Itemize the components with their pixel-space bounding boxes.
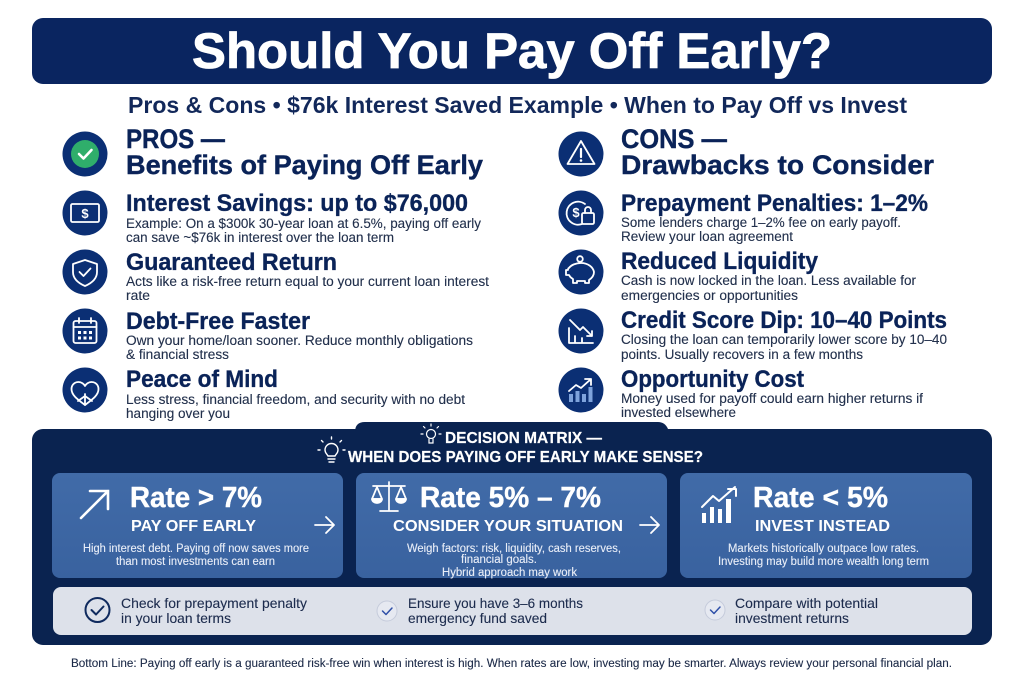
con: reduced liquidity: Cash is now locked in the loan. Less available for: [621, 273, 916, 288]
checklist bar: [53, 587, 972, 635]
card: rate 5 to 7%: [356, 473, 667, 579]
icon: scales: [372, 482, 406, 511]
icon: check 1: [86, 598, 110, 622]
matrix heading: [348, 430, 703, 466]
cons heading: Drawbacks to Consider: [621, 150, 935, 180]
card: rate below 5%: [680, 473, 972, 578]
pro: debt-free faster: & financial stress: [126, 347, 229, 362]
cons heading: [621, 124, 935, 180]
icon: large bulb: [318, 437, 345, 462]
icon: banknote: $: [81, 206, 89, 221]
con: prepayment penalties: Some lenders charge 1–2% fee on early payoff.: [621, 215, 901, 230]
card: rate above 7%: High interest debt. Paying off now saves more: [83, 543, 309, 555]
icon: piggy bank: [558, 250, 604, 294]
card: rate below 5%: Rate < 5%: [753, 482, 888, 514]
icon: warning triangle: [558, 132, 604, 176]
icon: falling chart: [558, 308, 604, 354]
panel: cons: [558, 124, 947, 420]
title banner: [32, 18, 992, 84]
arrow: [315, 517, 334, 533]
con: opportunity cost: Opportunity Cost: [621, 366, 804, 393]
checklist bar: in your loan terms: [121, 610, 231, 626]
checklist bar: Ensure you have 3–6 months: [408, 595, 583, 611]
icon: check 3: [705, 600, 725, 620]
pro: debt-free faster: Own your home/loan sooner. Reduce monthly obligations: [126, 333, 473, 348]
pro: guaranteed return: rate: [126, 288, 150, 303]
con: opportunity cost: Money used for payoff could earn higher returns if: [621, 391, 923, 406]
icon: banknote: [62, 190, 108, 236]
panel: decision matrix: [32, 422, 992, 645]
con: reduced liquidity: [621, 248, 916, 303]
card: rate 5 to 7%: CONSIDER YOUR SITUATION: [393, 518, 623, 535]
pro: debt-free faster: Debt-Free Faster: [126, 308, 310, 335]
pro: guaranteed return: [126, 249, 489, 303]
card: rate above 7%: than most investments can earn: [116, 556, 275, 568]
matrix heading: WHEN DOES PAYING OFF EARLY MAKE SENSE?: [348, 449, 703, 466]
card: rate 5 to 7%: Rate 5% – 7%: [420, 482, 601, 514]
con: prepayment penalties: Review your loan agreement: [621, 229, 793, 244]
bottom line: Bottom Line: Paying off early is a guaranteed risk-free win when interest is high. When rates are low, investing may be smarter. Always review your personal financial plan.: [71, 658, 952, 670]
con: credit score dip: Closing the loan can temporarily lower score by 10–40: [621, 332, 947, 347]
card: rate below 5%: Investing may build more wealth long term: [718, 556, 929, 568]
card: rate 5 to 7%: financial goals.: [461, 554, 537, 566]
pro: peace of mind: [126, 366, 465, 421]
icon: rising bar chart: [558, 368, 604, 412]
checklist bar: Check for prepayment penalty: [121, 595, 307, 611]
card: rate above 7%: Rate > 7%: [130, 482, 262, 514]
pro: peace of mind: Peace of Mind: [126, 366, 278, 393]
card: rate below 5%: INVEST INSTEAD: [755, 518, 890, 535]
checklist bar: investment returns: [735, 610, 849, 626]
pros heading: Benefits of Paying Off Early: [126, 150, 483, 180]
card: rate above 7%: [52, 473, 343, 578]
con: credit score dip: points. Usually recovers in a few months: [621, 347, 863, 362]
icon: check 2: [377, 601, 397, 621]
con: reduced liquidity: emergencies or opportunities: [621, 288, 798, 303]
pro: guaranteed return: Guaranteed Return: [126, 249, 337, 276]
title banner: Should You Pay Off Early?: [192, 23, 832, 79]
con: opportunity cost: invested elsewhere: [621, 405, 736, 420]
checklist bar: Compare with potential: [735, 595, 878, 611]
icon: shield: [62, 250, 108, 294]
con: reduced liquidity: Reduced Liquidity: [621, 248, 819, 275]
subtitle: Pros & Cons • $76k Interest Saved Example • When to Pay Off vs Invest: [128, 92, 907, 118]
con: opportunity cost: [621, 366, 923, 420]
pro: peace of mind: Less stress, financial freedom, and security with no debt: [126, 392, 465, 407]
con: prepayment penalties: [621, 190, 928, 244]
card: rate 5 to 7%: Hybrid approach may work: [442, 567, 577, 579]
icon: growth chart: [702, 487, 736, 523]
con: credit score dip: [621, 307, 947, 362]
pros heading: PROS —: [126, 124, 225, 154]
con: credit score dip: Credit Score Dip: 10–40 Points: [621, 307, 947, 334]
icon: coin and lock: $: [572, 205, 580, 220]
pros heading: [126, 124, 483, 180]
matrix heading: DECISION MATRIX —: [445, 430, 602, 447]
con: prepayment penalties: Prepayment Penalties: 1–2%: [621, 190, 928, 217]
icon: calendar: [62, 308, 108, 354]
icon: small bulb: [421, 424, 441, 443]
icon: green check: [62, 132, 108, 176]
cons heading: CONS —: [621, 124, 727, 154]
card: rate above 7%: PAY OFF EARLY: [131, 518, 256, 535]
pro: peace of mind: hanging over you: [126, 406, 230, 421]
pro: guaranteed return: Acts like a risk-free return equal to your current loan interest: [126, 274, 489, 289]
card: rate below 5%: Markets historically outpace low rates.: [728, 543, 919, 555]
icon: coin and lock: [558, 190, 604, 236]
pro: interest savings: can save ~$76k in interest over the loan term: [126, 230, 394, 245]
card: rate 5 to 7%: Weigh factors: risk, liquidity, cash reserves,: [407, 543, 621, 555]
pro: interest savings: Example: On a $300k 30-year loan at 6.5%, paying off early: [126, 216, 481, 231]
checklist bar: emergency fund saved: [408, 610, 547, 626]
pro: interest savings: Interest Savings: up to $76,000: [126, 190, 468, 217]
arrow: [640, 517, 659, 533]
panel: pros: [62, 124, 489, 421]
pro: interest savings: [126, 190, 481, 245]
icon: up arrow: [81, 491, 108, 518]
pro: debt-free faster: [126, 308, 473, 362]
icon: heart with peace sign: [62, 368, 108, 412]
